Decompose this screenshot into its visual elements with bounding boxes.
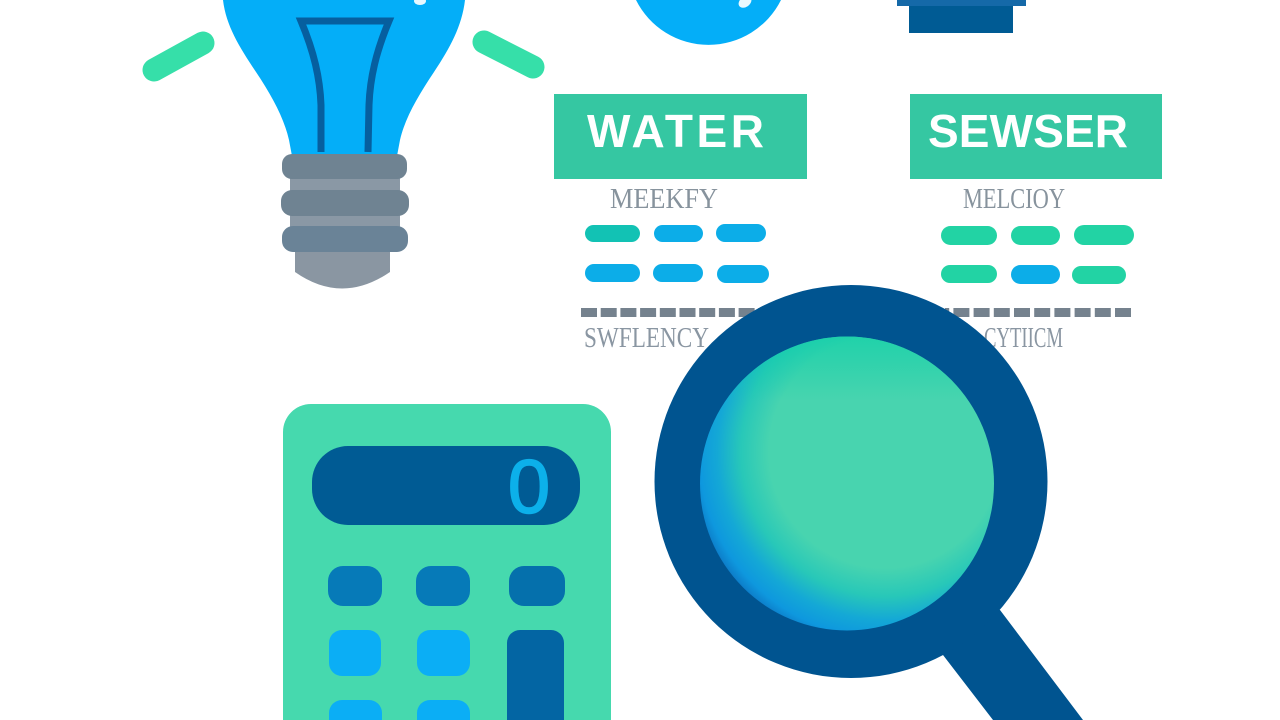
icon: calculator [283, 404, 611, 720]
sewer pills [941, 225, 1134, 284]
icon: light bulb [154, 0, 533, 288]
water heading: WATER [587, 105, 764, 157]
water dashed rule [581, 308, 760, 317]
calculator display: 0 [508, 445, 550, 530]
water heading [554, 94, 807, 179]
icon: magnifying glass [654, 285, 1083, 720]
sewer sublabel: MELCIOY [963, 184, 1065, 215]
light ray left [154, 43, 203, 70]
panel: water [554, 94, 807, 354]
water footer label: SWFLENCY [584, 322, 709, 354]
calculator body [283, 404, 611, 720]
lens top tint [700, 336, 994, 630]
magnifier handle [900, 590, 1083, 720]
water sublabel: MEEKFY [610, 183, 718, 215]
calculator display [312, 445, 580, 530]
screw base [281, 154, 409, 288]
drop highlight [736, 0, 754, 10]
calculator keys [328, 566, 565, 720]
bulb highlight [414, 0, 426, 5]
light ray right [484, 42, 533, 67]
sewer footer label: CYTIICM [984, 322, 1063, 354]
magnifier rim [654, 285, 1048, 678]
icon: water drop [636, 0, 781, 45]
water pills [585, 224, 769, 283]
sewer heading [910, 94, 1162, 179]
bulb filament [301, 21, 389, 152]
sewer heading: SEWSER [928, 105, 1128, 157]
bulb glass [223, 0, 465, 156]
magnifier lens [700, 336, 994, 630]
panel: sewer [910, 94, 1162, 354]
icon: pipe fitting [897, 0, 1026, 33]
sewer dashed rule [945, 308, 1131, 317]
